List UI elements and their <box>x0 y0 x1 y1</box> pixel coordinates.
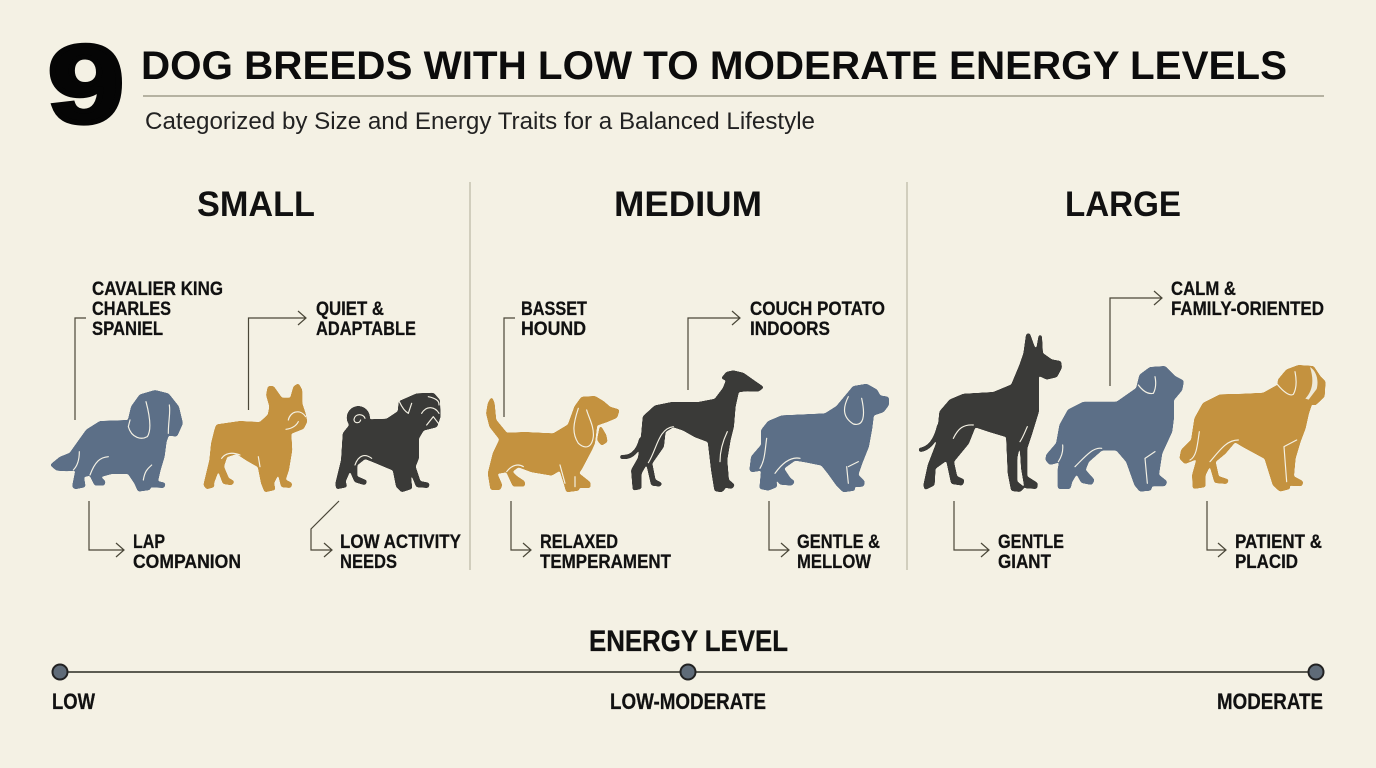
heading: large: LARGE <box>1065 185 1181 224</box>
callout: patient and placid: PATIENT & <box>1235 532 1322 553</box>
subtitle: Categorized by Size and Energy Traits for a Balanced Lifestyle <box>145 108 815 135</box>
icon: Saint Bernard silhouette <box>1180 366 1325 491</box>
marker: low <box>52 664 68 680</box>
callout: Cavalier King Charles Spaniel <box>75 279 223 420</box>
callout: Cavalier King Charles Spaniel: CAVALIER KING <box>92 279 223 300</box>
callout: low activity needs <box>311 501 461 573</box>
title: DOG BREEDS WITH LOW TO MODERATE ENERGY LEVELS <box>141 44 1287 88</box>
callout: Basset Hound <box>504 299 587 417</box>
callout: gentle giant <box>954 501 1064 573</box>
marker: low-moderate <box>680 664 696 680</box>
callout: patient and placid <box>1207 501 1322 573</box>
callout: Basset Hound: HOUND <box>521 319 586 340</box>
callout: quiet and adaptable: ADAPTABLE <box>316 319 416 340</box>
heading: small: SMALL <box>197 185 315 224</box>
callout: quiet and adaptable: QUIET & <box>316 299 384 320</box>
scale label: moderate: MODERATE <box>1217 689 1323 714</box>
callout: calm and family-oriented: CALM & <box>1171 279 1236 300</box>
callout: Cavalier King Charles Spaniel: CHARLES <box>92 299 171 320</box>
callout: gentle and mellow: GENTLE & <box>797 532 880 553</box>
callout: gentle giant: GIANT <box>998 552 1051 573</box>
header <box>48 23 1324 146</box>
callout: gentle and mellow: MELLOW <box>797 552 871 573</box>
panel: small <box>51 185 461 573</box>
callout: relaxed temperament: TEMPERAMENT <box>540 552 671 573</box>
scale label: low-moderate: LOW-MODERATE <box>610 689 766 714</box>
panel: medium <box>487 185 888 573</box>
callout: low activity needs: LOW ACTIVITY <box>340 532 461 553</box>
heading: medium: MEDIUM <box>614 185 762 224</box>
callout: calm and family-oriented: FAMILY-ORIENTED <box>1171 299 1324 320</box>
callout: calm and family-oriented <box>1110 279 1324 386</box>
icon: Pug silhouette <box>336 393 440 492</box>
callout: relaxed temperament: RELAXED <box>540 532 618 553</box>
scale title: ENERGY LEVEL <box>589 625 788 658</box>
callout: Cavalier King Charles Spaniel: SPANIEL <box>92 319 163 340</box>
callout: Basset Hound: BASSET <box>521 299 587 320</box>
callout: couch potato indoors <box>688 299 885 390</box>
callout: quiet and adaptable <box>248 299 416 410</box>
icon: Greyhound silhouette <box>621 371 763 492</box>
icon: Cavalier silhouette <box>51 391 182 491</box>
callout: lap companion <box>89 501 241 573</box>
callout: low activity needs: NEEDS <box>340 552 397 573</box>
callout: gentle giant: GENTLE <box>998 532 1064 553</box>
icon: Newfoundland silhouette <box>1046 367 1183 491</box>
icon: French bulldog silhouette <box>204 384 307 492</box>
callout: relaxed temperament <box>511 501 671 573</box>
big number 9: 9 <box>48 23 124 146</box>
callout: lap companion: LAP <box>133 532 165 553</box>
panel: large <box>919 185 1325 573</box>
callout: couch potato indoors: COUCH POTATO <box>750 299 885 320</box>
icon: Basset Hound silhouette <box>487 397 619 492</box>
icon: spaniel silhouette <box>750 384 888 492</box>
callout: couch potato indoors: INDOORS <box>750 319 830 340</box>
marker: moderate <box>1308 664 1324 680</box>
energy level scale <box>52 625 1324 714</box>
icon: Great Dane silhouette <box>919 334 1061 491</box>
callout: gentle and mellow <box>769 501 880 573</box>
callout: lap companion: COMPANION <box>133 552 241 573</box>
callout: patient and placid: PLACID <box>1235 552 1298 573</box>
scale label: low: LOW <box>52 689 95 714</box>
